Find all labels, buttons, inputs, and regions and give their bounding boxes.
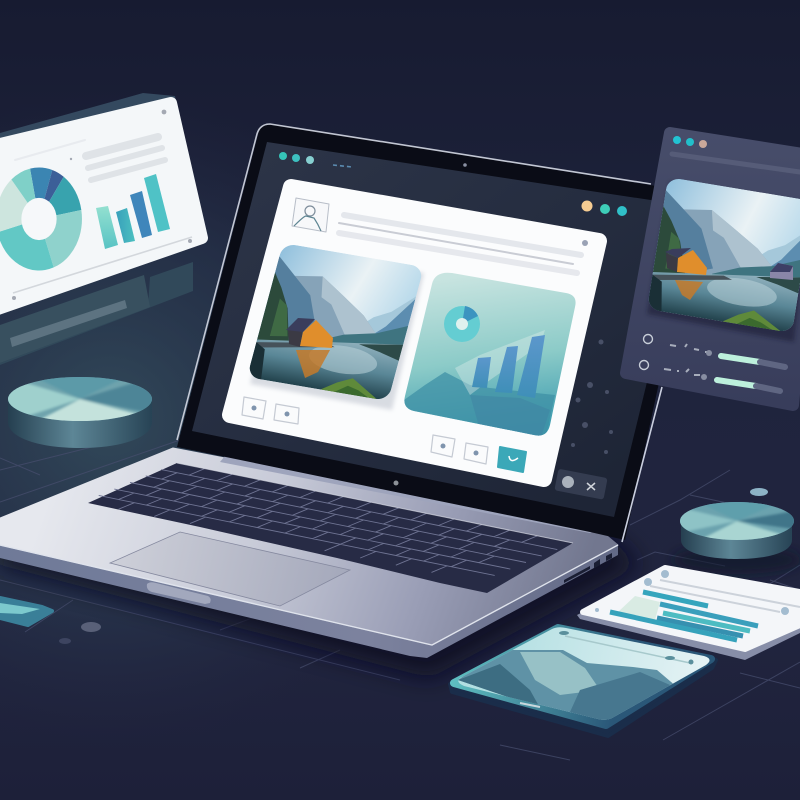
keyboard (83, 463, 573, 593)
cabin (286, 318, 333, 378)
floor grid lines (0, 440, 800, 760)
header lines (650, 580, 800, 612)
text lines (15, 137, 165, 180)
hinge logo (394, 480, 398, 486)
donut chart (0, 167, 82, 271)
trackpad (110, 532, 350, 606)
screen lid black bezel (177, 124, 700, 540)
right lid rim (622, 387, 662, 542)
control row 1 (644, 334, 785, 367)
bar chart (96, 174, 170, 249)
address bar (672, 154, 800, 172)
card back edge (0, 93, 176, 146)
window dots right (582, 200, 627, 216)
mountains (458, 650, 677, 725)
side ports (564, 553, 612, 583)
buttons (242, 397, 488, 464)
laptop base edge (0, 545, 618, 658)
laptop display (192, 142, 690, 517)
ghost arrow (455, 330, 545, 395)
bottom right screen icons (554, 469, 608, 500)
button glyphs (252, 406, 478, 456)
keyboard frame line (177, 463, 573, 543)
panel: left white analytics card (0, 93, 202, 311)
control row 2 (640, 360, 780, 391)
image: lake cabin (647, 177, 800, 342)
small teal chip (0, 598, 52, 625)
window dots (673, 136, 707, 148)
horizontal bars (610, 592, 758, 640)
chart bars (472, 357, 491, 388)
panel: main white app window (230, 187, 599, 479)
axis line (13, 237, 192, 293)
panel: mountain tablet (448, 624, 718, 738)
webcam (463, 163, 467, 167)
front lip highlight (0, 545, 618, 645)
panel: small bar chart card (577, 568, 800, 660)
card dots (595, 570, 789, 615)
floor dots (59, 622, 101, 644)
tablet top dots (559, 631, 694, 664)
distant house (770, 263, 793, 280)
hinge strip (220, 456, 600, 533)
card dots (12, 110, 192, 300)
panel: left card reflection (0, 262, 193, 365)
tablet top line (565, 636, 690, 663)
mini donut (444, 306, 480, 342)
pale bar block (618, 596, 660, 620)
small floating dot (750, 488, 768, 496)
status dot (582, 240, 588, 246)
image: chart panel (404, 273, 576, 440)
laptop (0, 124, 700, 658)
image: lake cabin (247, 243, 424, 410)
confirm button (498, 447, 526, 472)
header text lines (339, 215, 581, 273)
reflected slider strip (10, 300, 127, 347)
window dots left (279, 152, 314, 164)
front notch (147, 582, 211, 604)
display sparkle dots (571, 340, 613, 454)
avatar box (292, 198, 329, 232)
mountain silhouette (404, 372, 555, 440)
lid rim highlights (177, 124, 651, 440)
small toolbar marks (333, 165, 352, 167)
left disc (8, 377, 152, 448)
cabin (665, 248, 707, 300)
laptop shadow (0, 530, 640, 678)
home button (520, 703, 540, 707)
laptop base deck (0, 448, 618, 645)
panel: right dark media card (626, 133, 800, 405)
right disc (670, 500, 800, 574)
card face (0, 103, 202, 311)
